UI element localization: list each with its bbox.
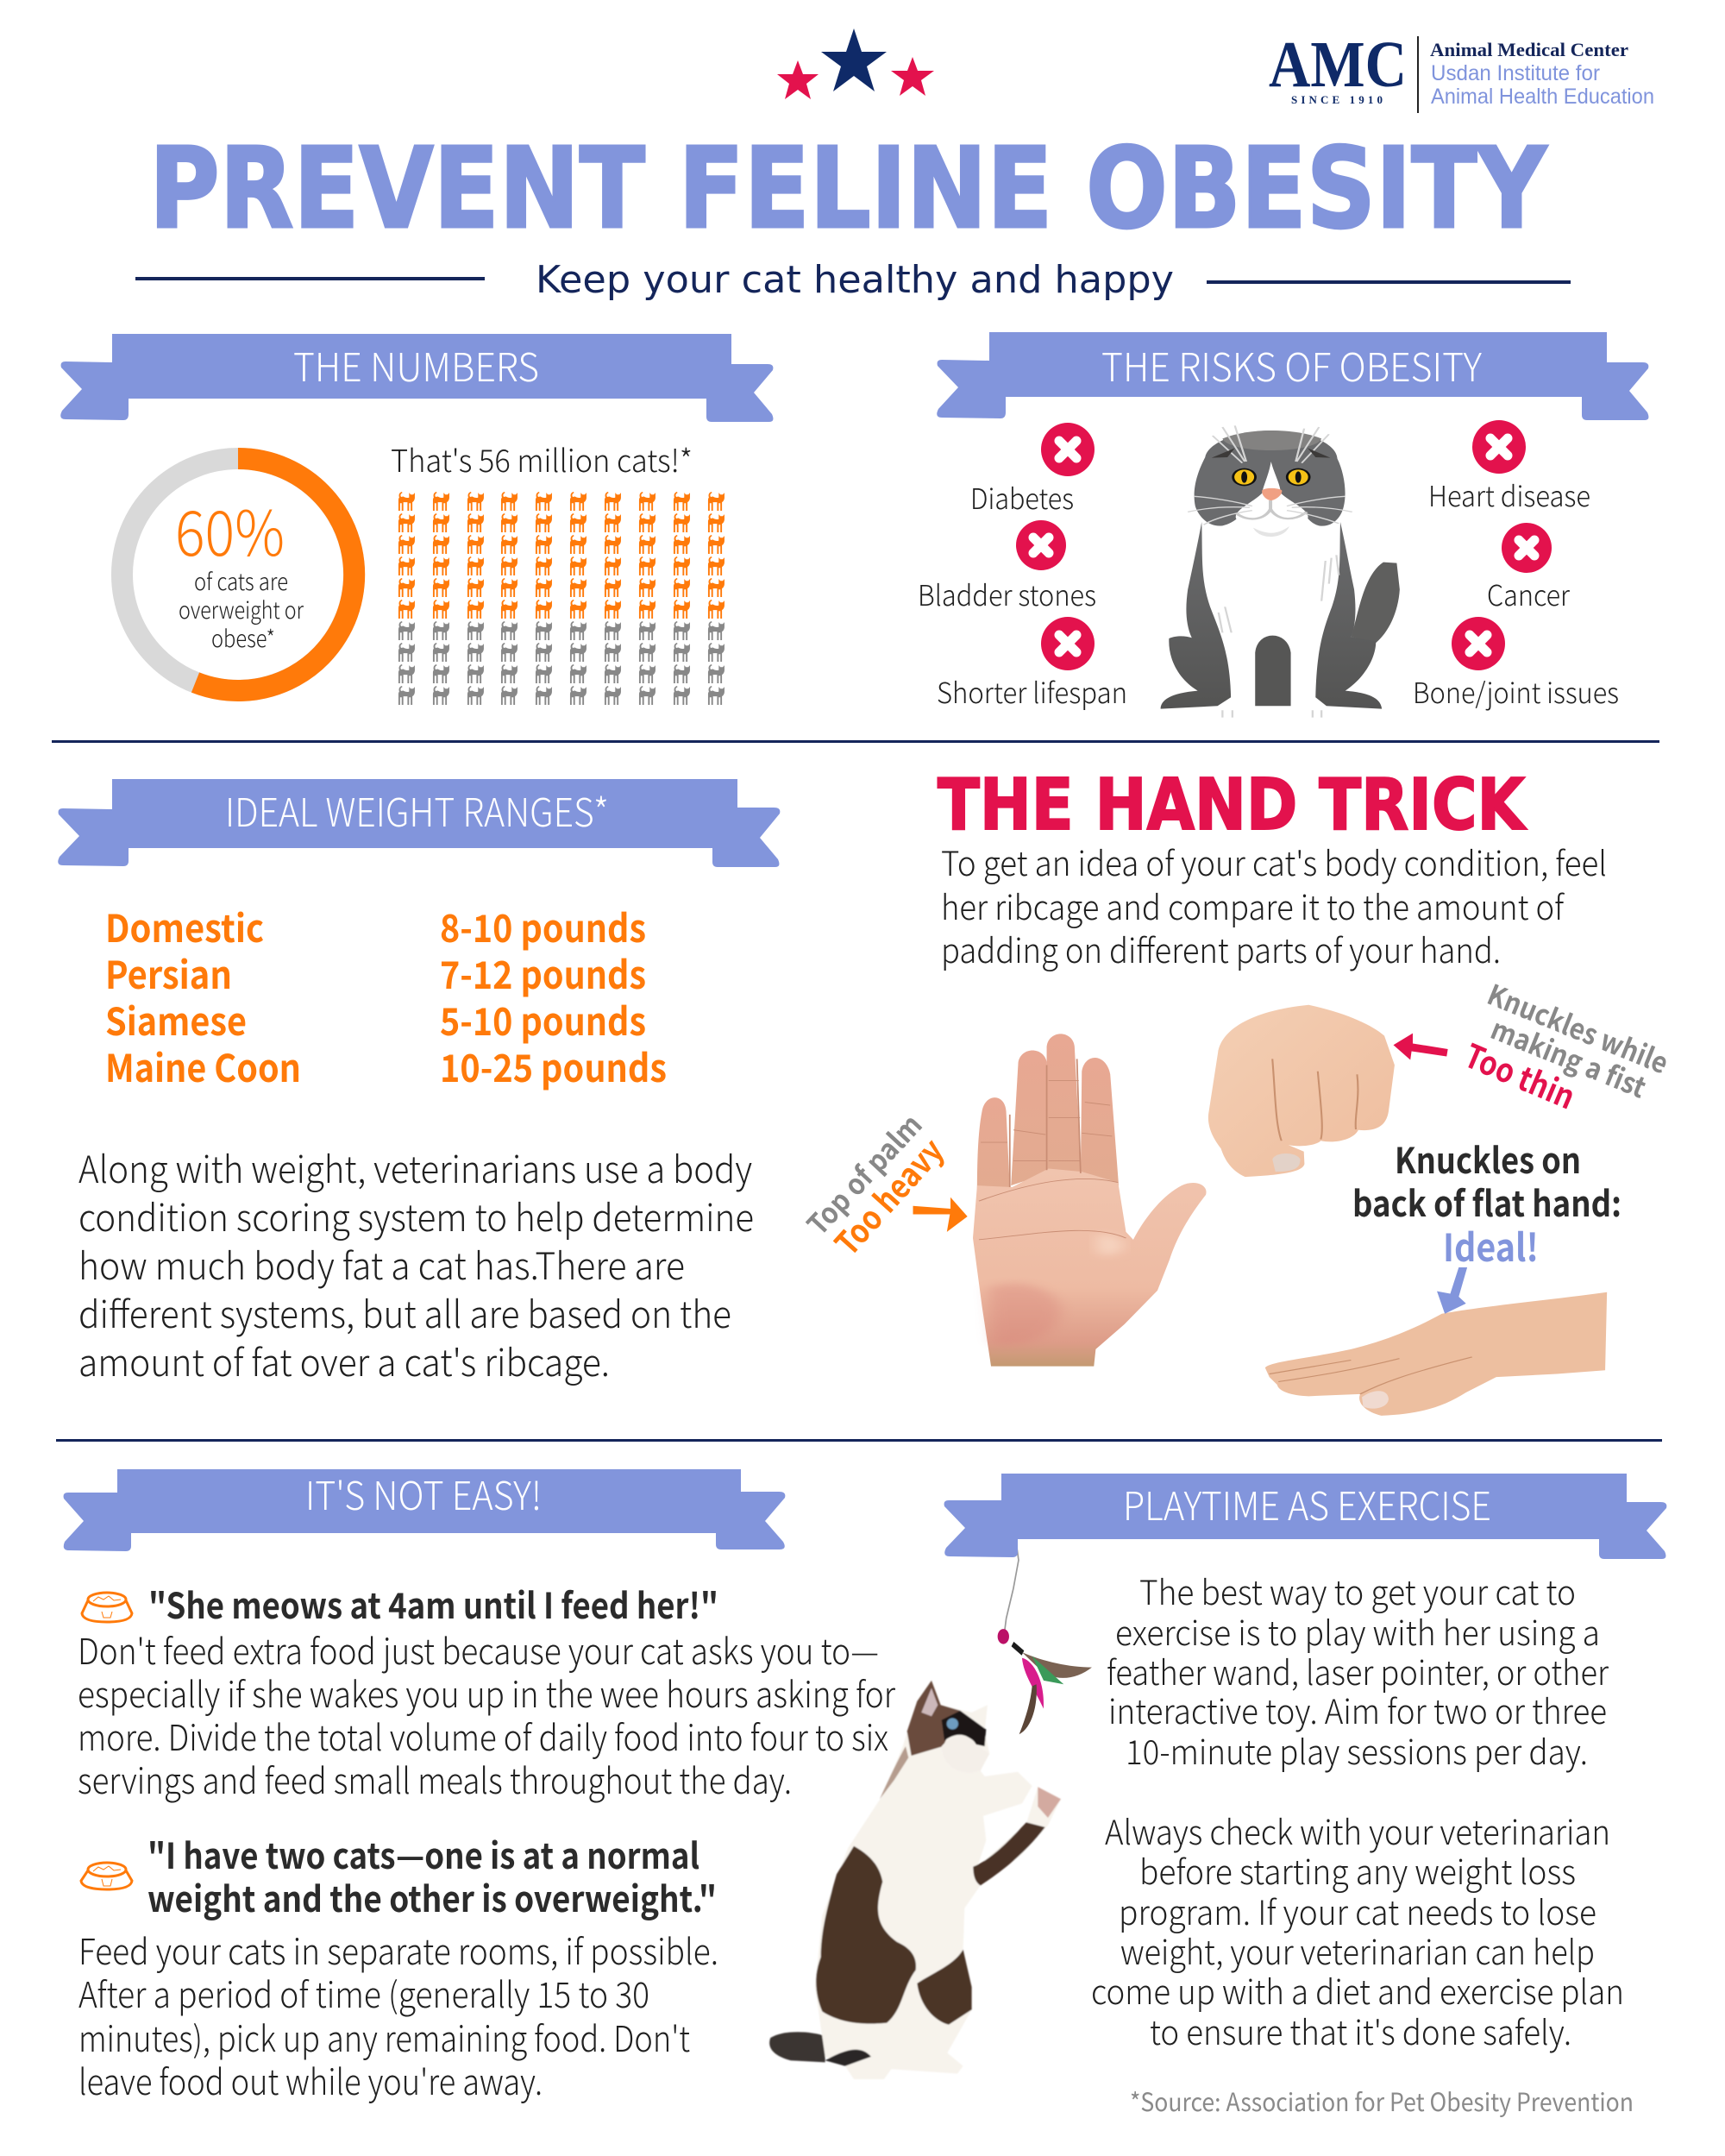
- photo: open palm: [973, 1034, 1207, 1367]
- risk labels: Shorter lifespan: [937, 670, 1127, 712]
- body condition paragraph: amount of fat over a cat's ribcage.: [78, 1334, 610, 1387]
- text: veterinarian advice: come up with a diet and exercise plan: [1091, 1966, 1624, 2015]
- label: knuckles while making a fist: Knuckles while: [1482, 972, 1675, 1082]
- text: feeding advice: [78, 1623, 895, 1804]
- AMC logo: Animal Medical Center: [1430, 39, 1628, 60]
- text: veterinarian advice: program. If your cat needs to lose: [1119, 1887, 1596, 1935]
- quote: two cats: [147, 1827, 717, 1922]
- label: top of palm: Top of palm: [796, 1103, 930, 1243]
- ribbon: not easy: [64, 1465, 785, 1551]
- photo: cat playing with feather wand: [769, 1681, 1061, 2079]
- label: too heavy: Too heavy: [822, 1127, 953, 1264]
- label: knuckles on back of flat hand: [1352, 1132, 1622, 1227]
- panel: hand trick: [796, 764, 1675, 1416]
- label: ideal: Ideal!: [1443, 1217, 1539, 1273]
- divider: [52, 740, 1659, 743]
- text: exercise advice: The best way to get your cat to: [1139, 1567, 1576, 1615]
- donut chart 60 percent: overweight or: [179, 592, 304, 625]
- photo: flat hand: [1265, 1292, 1607, 1416]
- body condition paragraph: [78, 1141, 754, 1387]
- feather wand: [998, 1543, 1092, 1734]
- panel: the numbers: [60, 334, 773, 705]
- text: exercise advice: feather wand, laser pointer, or other: [1107, 1647, 1609, 1695]
- ribbon: ideal weight: [58, 779, 780, 867]
- heading: 56 million cats: That's 56 million cats!*: [391, 437, 693, 481]
- source note: *Source: Association for Pet Obesity Prevention: [1130, 2083, 1634, 2119]
- text: feeding advice: especially if she wakes you up in the wee hours asking for: [78, 1666, 895, 1718]
- AMC logo: Animal Health Education: [1431, 85, 1654, 109]
- illustration: gray cat: [1161, 425, 1400, 718]
- ribbon: the numbers: [60, 334, 773, 422]
- weight table: [105, 898, 667, 1093]
- text: two cats advice: [78, 1923, 718, 2105]
- risk labels: [918, 474, 1619, 712]
- text: two cats advice: minutes), pick up any remaining food. Don't: [78, 2010, 690, 2062]
- subtitle: Keep your cat healthy and happy: [536, 258, 1174, 302]
- risk labels: Bone/joint issues: [1413, 670, 1619, 712]
- title: PREVENT FELINE OBESITY: [149, 124, 1547, 254]
- donut chart 60 percent: [122, 458, 354, 690]
- ribbon: risks: THE RISKS OF OBESITY: [1101, 336, 1482, 393]
- text: exercise advice: [1107, 1567, 1609, 1775]
- text: feeding advice: Don't feed extra food just because your cat asks you to—: [78, 1623, 879, 1675]
- panel: playtime as exercise: [944, 1474, 1666, 2119]
- text: feeding advice: servings and feed small meals throughout the day.: [78, 1752, 792, 1804]
- arrow: ideal: [1437, 1267, 1467, 1314]
- photo: fist: [1208, 1005, 1395, 1177]
- ribbon: ideal weight: IDEAL WEIGHT RANGES*: [225, 782, 609, 838]
- heading: the hand trick: THE HAND TRICK: [938, 764, 1527, 846]
- text: veterinarian advice: to ensure that it's done safely.: [1150, 2007, 1571, 2055]
- body condition paragraph: how much body fat a cat has.There are: [78, 1237, 685, 1291]
- icon: food bowl: [82, 1593, 132, 1622]
- icon: food bowl: [81, 1863, 132, 1889]
- body condition paragraph: condition scoring system to help determine: [78, 1189, 754, 1242]
- ribbon: risks: [937, 332, 1648, 420]
- text: exercise advice: interactive toy. Aim for two or three: [1108, 1686, 1607, 1734]
- risk labels: Cancer: [1487, 573, 1570, 614]
- weight table: 7-12 pounds: [440, 945, 646, 1000]
- hand trick intro: [941, 838, 1607, 973]
- risk labels: Bladder stones: [918, 573, 1096, 614]
- ribbon: playtime: PLAYTIME AS EXERCISE: [1123, 1475, 1491, 1531]
- text: veterinarian advice: [1091, 1807, 1624, 2055]
- quote: two cats: weight and the other is overweight.": [147, 1870, 717, 1922]
- weight table: Domestic: [105, 898, 264, 953]
- weight table: 8-10 pounds: [440, 898, 646, 953]
- risk labels: Diabetes: [970, 476, 1074, 518]
- panel: it's not easy: [64, 1465, 895, 2105]
- ribbon: not easy: IT'S NOT EASY!: [305, 1465, 542, 1521]
- divider: [56, 1439, 1662, 1442]
- panel: risks of obesity: [918, 332, 1648, 718]
- arrow: too heavy: [913, 1197, 968, 1232]
- arrow: too thin: [1394, 1034, 1448, 1059]
- text: feeding advice: more. Divide the total volume of daily food into four to six: [78, 1709, 888, 1761]
- panel: ideal weight ranges: [58, 779, 780, 1387]
- quote: two cats: "I have two cats—one is at a normal: [147, 1827, 699, 1879]
- weight table: Maine Coon: [105, 1038, 301, 1093]
- weight table: Persian: [105, 945, 232, 1000]
- quote: she meows: "She meows at 4am until I feed her!": [148, 1577, 718, 1629]
- hand trick intro: her ribcage and compare it to the amount of: [941, 882, 1565, 930]
- weight table: 5-10 pounds: [440, 991, 646, 1047]
- cat pictogram grid: [398, 492, 724, 705]
- donut chart 60 percent: 60%: [175, 483, 285, 574]
- AMC logo: [1269, 28, 1654, 113]
- hand trick intro: padding on different parts of your hand.: [941, 925, 1501, 973]
- text: veterinarian advice: weight, your veterinarian can help: [1120, 1927, 1595, 1975]
- text: exercise advice: 10-minute play sessions per day.: [1126, 1726, 1588, 1775]
- text: two cats advice: leave food out while you're away.: [78, 2053, 543, 2105]
- body condition paragraph: Along with weight, veterinarians use a body: [78, 1141, 752, 1194]
- AMC logo: SINCE 1910: [1291, 93, 1383, 106]
- ribbon: the numbers: THE NUMBERS: [293, 336, 539, 393]
- hand trick intro: To get an idea of your cat's body condition, feel: [941, 838, 1607, 886]
- body condition paragraph: different systems, but all are based on the: [78, 1285, 731, 1339]
- icon: x marks: [1016, 420, 1552, 670]
- label: too thin: Too thin: [1458, 1029, 1584, 1118]
- ribbon: playtime: [944, 1474, 1666, 1559]
- donut chart 60 percent: obese*: [211, 620, 275, 654]
- text: veterinarian advice: Always check with your veterinarian: [1105, 1807, 1610, 1855]
- subtitle: [135, 258, 1571, 302]
- weight table: 10-25 pounds: [440, 1038, 667, 1093]
- stars logo: [777, 28, 934, 99]
- text: exercise advice: exercise is to play with her using a: [1115, 1607, 1600, 1656]
- AMC logo: Usdan Institute for: [1431, 61, 1600, 85]
- text: two cats advice: After a period of time (generally 15 to 30: [78, 1966, 649, 2018]
- text: two cats advice: Feed your cats in separate rooms, if possible.: [78, 1923, 718, 1975]
- weight table: Siamese: [105, 991, 247, 1047]
- label: knuckles on back of flat hand: back of flat hand:: [1352, 1175, 1622, 1227]
- label: knuckles while making a fist: making a fist: [1485, 1007, 1653, 1106]
- risk labels: Heart disease: [1428, 474, 1590, 515]
- text: veterinarian advice: before starting any weight loss: [1139, 1846, 1576, 1895]
- label: knuckles on back of flat hand: Knuckles on: [1395, 1132, 1581, 1184]
- donut chart 60 percent: of cats are: [194, 563, 288, 597]
- AMC logo: AMC: [1269, 28, 1407, 101]
